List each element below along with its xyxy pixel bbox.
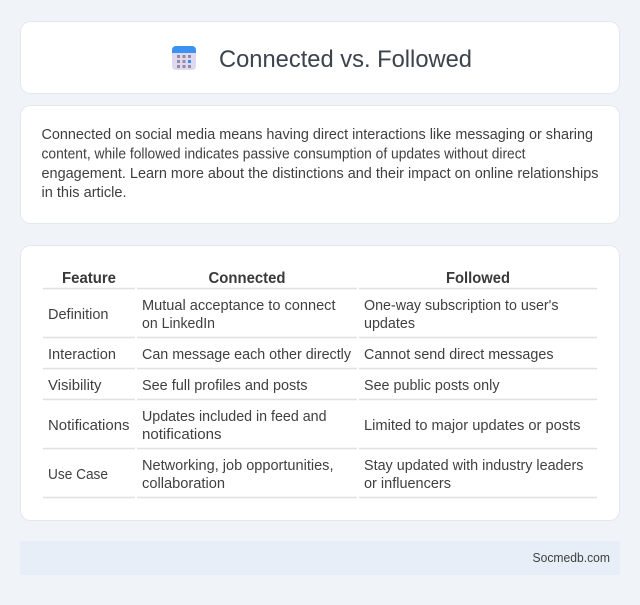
icon: calendar [172,46,196,70]
row: Interaction [43,347,597,368]
row: Visibility: Visibility [48,378,102,394]
row: Interaction: Can message each other directly [142,347,352,363]
panel: comparison table [20,246,620,520]
row: Notifications: Updates included in feed and [142,409,326,425]
row: Notifications: Limited to major updates or posts [364,418,580,434]
title: Connected vs. Followed [219,46,472,73]
row: Notifications: Notifications [48,418,130,434]
row: Use Case [43,458,597,498]
row: Use Case: Use Case [48,467,108,483]
table header: Feature [62,270,116,287]
row: Use Case: collaboration [142,476,225,492]
row: Use Case: or influencers [364,476,451,492]
row: Notifications: notifications [142,427,222,443]
row: Definition: updates [364,316,415,332]
text block: introduction paragraph [42,127,598,201]
row: Definition: One-way subscription to user's [364,298,558,314]
row: Visibility [43,378,597,400]
row: Definition: on LinkedIn [142,316,215,332]
text block: introduction paragraph: in this article. [42,185,126,201]
row: Interaction: Cannot send direct messages [364,347,554,363]
panel: introduction [20,106,620,224]
table header [43,270,597,288]
footer bar [20,541,620,575]
row: Use Case: Networking, job opportunities, [142,458,334,474]
row: Notifications [43,409,597,448]
text block: introduction paragraph: content, while followed indicates passive consumption of updates without direct [42,146,526,162]
text block: introduction paragraph: Connected on social media means having direct interactions like messaging or sharing [42,127,593,143]
table header: Connected [208,270,286,287]
row: Definition: Mutual acceptance to connect [142,298,336,314]
row: Definition [43,298,597,338]
row: Definition: Definition [48,307,108,323]
text block: introduction paragraph: engagement. Learn more about the distinctions and their impact on online relationships [42,166,598,182]
footer source text: Socmedb.com [532,550,610,565]
row: Use Case: Stay updated with industry leaders [364,458,584,474]
row: Visibility: See full profiles and posts [142,378,308,394]
panel: title card [20,22,620,94]
row: Visibility: See public posts only [364,378,500,394]
row: Interaction: Interaction [48,347,116,363]
table header: Followed [446,270,510,287]
